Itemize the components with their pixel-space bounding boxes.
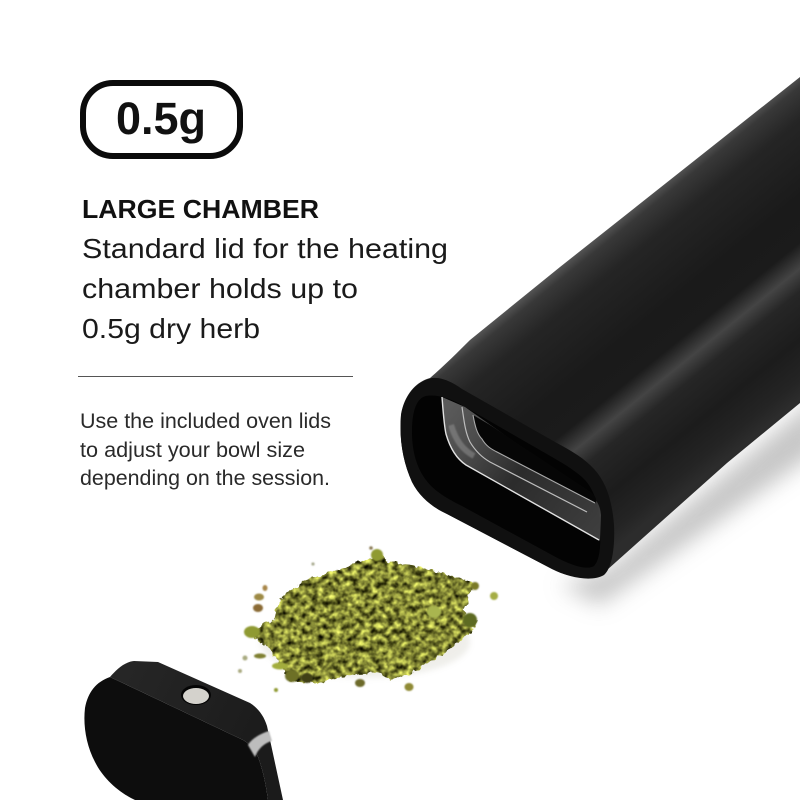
text block: chamber description: Standard lid for the heating (82, 233, 448, 264)
herb pile (238, 546, 498, 692)
text block: chamber description: chamber holds up to (82, 273, 358, 304)
oven lid (84, 661, 283, 800)
badge: 0.5g (83, 83, 240, 156)
text block: chamber description: 0.5g dry herb (82, 313, 260, 344)
text block: oven lids note: to adjust your bowl size (80, 439, 305, 462)
device body tube (400, 77, 800, 577)
lid magnet dot (181, 685, 211, 705)
herb soft shadow (260, 606, 470, 678)
device cast shadow (560, 395, 800, 605)
badge: 0.5g: 0.5g (116, 93, 206, 144)
device inner cavity (412, 396, 600, 568)
text block: oven lids note: Use the included oven lids (80, 410, 331, 433)
lid edge highlight (248, 731, 272, 757)
herb main mound (246, 553, 477, 683)
device mouth rim (400, 378, 614, 579)
lid top face (110, 661, 283, 800)
text block: oven lids note (80, 410, 331, 490)
text block: oven lids note: depending on the session. (80, 467, 330, 490)
device glass chamber (442, 397, 601, 541)
device: black vaporizer body (400, 77, 800, 579)
heading: large chamber: LARGE CHAMBER (82, 194, 319, 224)
text block: chamber description (82, 233, 448, 344)
lid front face (84, 677, 268, 800)
herb scattered crumbs (238, 546, 498, 692)
